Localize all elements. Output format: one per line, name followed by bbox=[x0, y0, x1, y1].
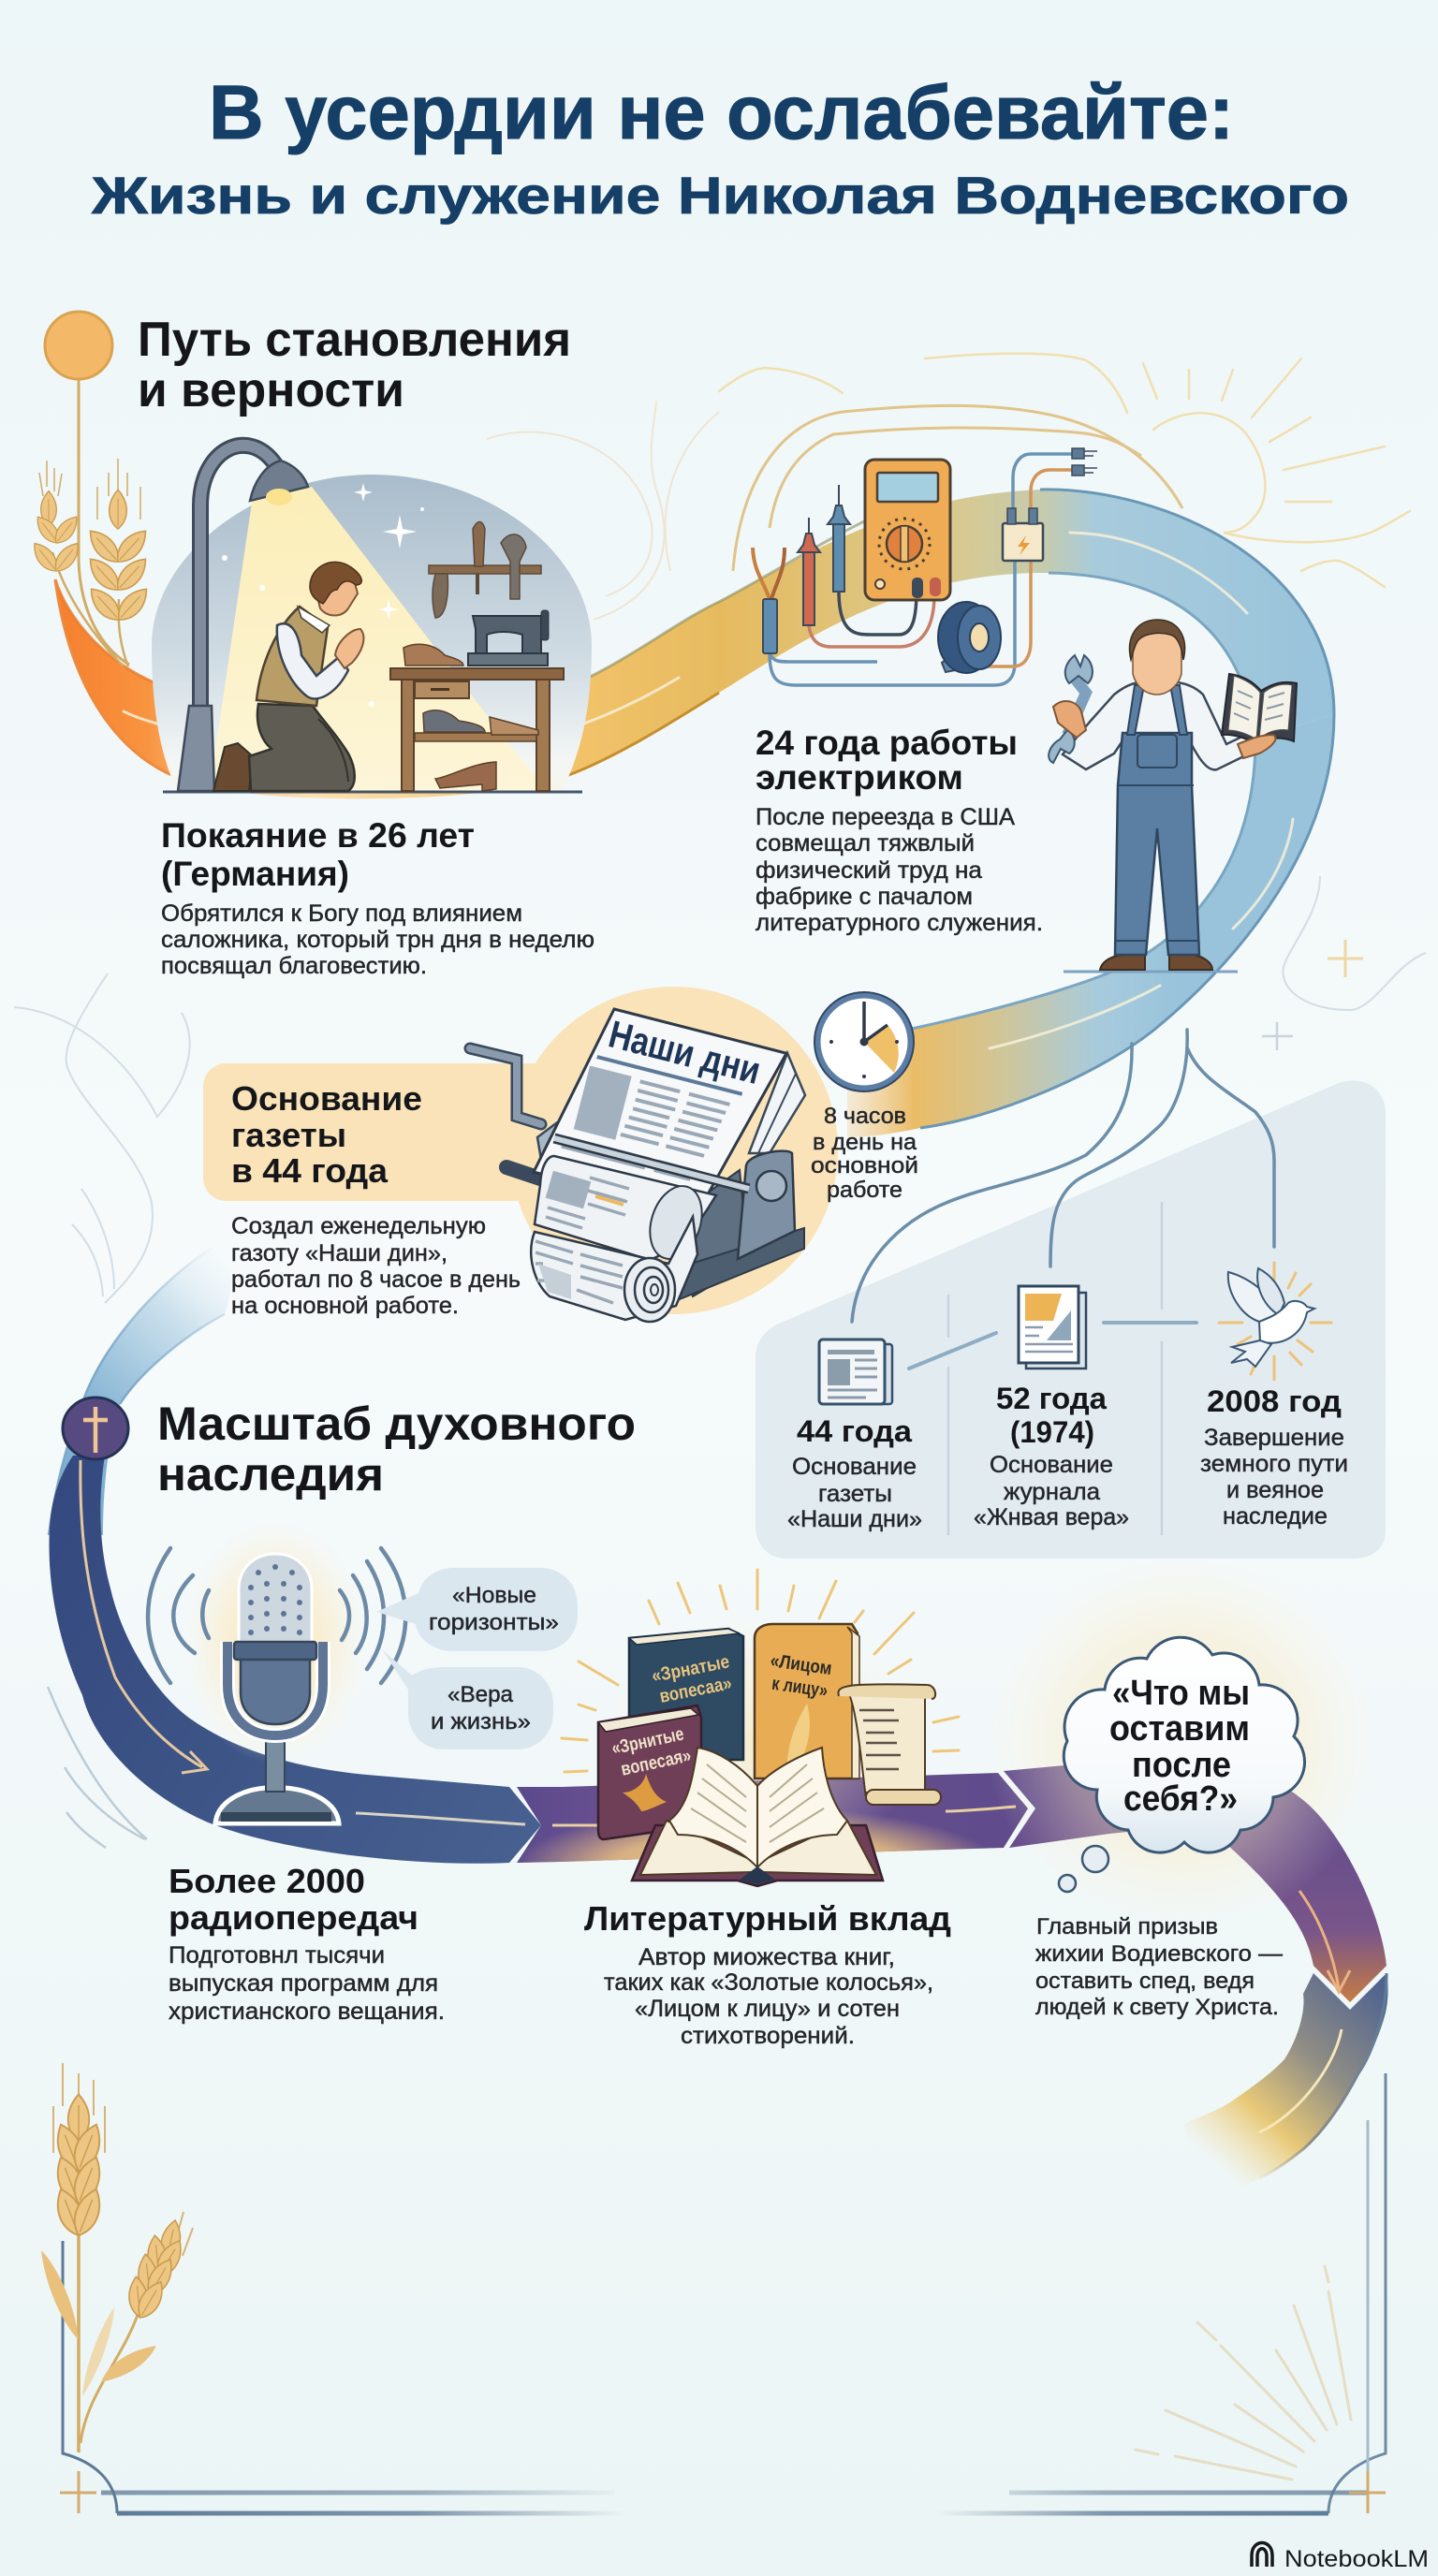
icon: dove with rays bbox=[1219, 1263, 1331, 1380]
text block: radio programs: Более 2000 bbox=[169, 1862, 365, 1900]
heading: Покаяние в 26 лет bbox=[161, 816, 475, 855]
maroon book: вопесая» bbox=[619, 1745, 693, 1780]
ribbon lower part bbox=[847, 714, 1334, 1137]
boot bbox=[213, 743, 253, 791]
speech bubble: Вера и жизнь: «Вера bbox=[448, 1682, 514, 1707]
question: «Что мы bbox=[1112, 1674, 1250, 1713]
heading: section one bbox=[138, 313, 571, 417]
paper stack bbox=[749, 1053, 805, 1153]
timeline entry: 2008 bbox=[1200, 1384, 1348, 1530]
description bbox=[756, 804, 1043, 936]
base bbox=[655, 1228, 804, 1303]
heading: в 44 года bbox=[231, 1151, 389, 1190]
heading: электриком bbox=[756, 758, 963, 797]
decorative wisps, left side bbox=[14, 973, 190, 1303]
thought cloud with question bbox=[986, 1554, 1379, 1928]
sound waves bbox=[148, 1548, 405, 1683]
gold glow under books bbox=[522, 1812, 980, 1863]
text: 8 hours note: 8 часов bbox=[824, 1104, 906, 1129]
question: оставим bbox=[1109, 1709, 1250, 1749]
side stem bbox=[81, 2315, 138, 2443]
text: newspaper description: Создал еженедельную bbox=[231, 1213, 486, 1239]
kneeling man praying bbox=[213, 562, 363, 791]
panel: timeline backdrop bbox=[756, 1081, 1386, 1559]
box bbox=[203, 1063, 562, 1201]
speech bubble: Новые горизонты: «Новые bbox=[452, 1583, 536, 1608]
glow bbox=[598, 1610, 917, 1872]
wheat ear left bbox=[28, 461, 124, 666]
gold book bbox=[755, 1624, 859, 1778]
section marker: cross node bbox=[63, 1398, 128, 1459]
timeline entry: 2008: Завершение bbox=[1204, 1425, 1344, 1451]
timeline entry: 44 years bbox=[787, 1414, 922, 1532]
crank handle bbox=[470, 1048, 541, 1124]
sewing machine bbox=[468, 610, 549, 666]
description: саложника, который трн дня в неделю bbox=[161, 927, 594, 953]
timeline entry: 2008: и веяное bbox=[1226, 1477, 1324, 1503]
vest bbox=[257, 607, 328, 706]
scene: electrician tools bbox=[753, 448, 1097, 685]
shoes bbox=[1100, 955, 1212, 970]
navy book bbox=[629, 1629, 743, 1760]
rays bbox=[562, 1570, 959, 1772]
text block: radio programs: Подготовнл тысячи bbox=[169, 1942, 385, 1969]
stem bbox=[266, 1735, 285, 1792]
text block: radio programs: христианского вещания. bbox=[169, 1998, 445, 2025]
cloud bbox=[1064, 1637, 1305, 1852]
timeline entry: 44 years: «Наши дни» bbox=[787, 1506, 922, 1532]
ground line bbox=[163, 790, 582, 794]
timeline entry: 2008: наследие bbox=[1223, 1503, 1328, 1530]
lower paper roll bbox=[531, 1217, 697, 1322]
text block: radio programs: выпуская программ для bbox=[169, 1970, 438, 1997]
text: 8 hours note: работе bbox=[827, 1178, 902, 1203]
heading: (Германия) bbox=[161, 855, 349, 893]
illustration: printing press bbox=[470, 1000, 805, 1322]
probes bbox=[798, 485, 850, 625]
base bbox=[215, 1788, 339, 1823]
maroon book bbox=[598, 1705, 701, 1839]
gold book: к лицу» bbox=[770, 1674, 829, 1702]
platform line bbox=[1064, 970, 1238, 973]
timeline entry: 52 years: «Жнвая вера» bbox=[974, 1504, 1129, 1530]
main stem bbox=[77, 2235, 81, 2452]
timeline separators bbox=[948, 1202, 1162, 1535]
bottom frame bbox=[60, 2073, 1386, 2513]
ribbon: final fading segment bbox=[1184, 1973, 1388, 2200]
question: после bbox=[1132, 1746, 1231, 1785]
timeline entry: 52 years: 52 года bbox=[996, 1382, 1107, 1415]
ribbon upper part bbox=[55, 490, 1334, 798]
text block: main call: оставить спед, ведя bbox=[1035, 1969, 1255, 1994]
head bbox=[315, 566, 358, 616]
collar bbox=[298, 607, 330, 633]
text block: repentance at 26 bbox=[161, 816, 594, 979]
timeline entry: 44 years: газеты bbox=[818, 1481, 892, 1507]
text: newspaper description: на основной работе. bbox=[231, 1293, 459, 1319]
text block: 24 years as electrician bbox=[756, 724, 1043, 936]
timeline entry: 2008: 2008 год bbox=[1207, 1384, 1342, 1418]
text: newspaper description bbox=[231, 1213, 521, 1319]
shoes bbox=[404, 644, 538, 791]
timeline entry: 52 years: (1974) bbox=[1010, 1415, 1094, 1449]
decorative rays, bottom right bbox=[1136, 2266, 1351, 2480]
heading bbox=[756, 724, 1018, 797]
description bbox=[161, 900, 594, 979]
open book bbox=[632, 1748, 883, 1886]
icon: clock bbox=[814, 992, 914, 1091]
decorative wisps near the first scene bbox=[487, 401, 719, 620]
left frame bbox=[537, 1112, 599, 1236]
text block: radio programs bbox=[169, 1862, 445, 2025]
text block: main call: жихии Водиевского — bbox=[1035, 1941, 1283, 1967]
description: Обрятился к Богу под влиянием bbox=[161, 900, 522, 927]
right frame bbox=[738, 1151, 795, 1259]
open book on palm bbox=[1222, 674, 1297, 758]
workbench bbox=[390, 668, 564, 791]
navy book: «Зрнатые bbox=[650, 1651, 731, 1687]
text block: literary contribution: таких как «Золотые колосья», bbox=[604, 1969, 933, 1996]
text block: main call: Главный призыв bbox=[1036, 1914, 1218, 1939]
logo: NotebookLM: NotebookLM bbox=[1284, 2546, 1429, 2572]
heading bbox=[231, 1079, 422, 1190]
scene: repentance under street lamp bbox=[152, 446, 592, 792]
newspaper sheet: Наши дни bbox=[605, 1012, 765, 1092]
title bbox=[91, 70, 1349, 225]
decorative sun and gold lines, top right bbox=[719, 354, 1410, 587]
timeline entry: 52 years: журнала bbox=[1004, 1479, 1100, 1505]
thought bubbles bbox=[1082, 1846, 1108, 1872]
roller of paper bbox=[535, 1156, 716, 1266]
axle bbox=[506, 1167, 543, 1179]
illustration: radio microphone bbox=[148, 1520, 405, 1823]
speech bubble: Новые горизонты bbox=[376, 1568, 578, 1651]
yoke bbox=[227, 1642, 323, 1735]
question: себя?» bbox=[1123, 1779, 1238, 1819]
text block: literary contribution bbox=[584, 1899, 951, 2049]
timeline entry: 52 years: Основание bbox=[990, 1452, 1113, 1478]
speech bubble: Вера и жизнь: и жизнь» bbox=[431, 1709, 531, 1734]
timeline entry: 2008: земного пути bbox=[1200, 1451, 1348, 1477]
description: фабрике с пачалом bbox=[756, 884, 973, 910]
maroon book: «Зрнитые bbox=[610, 1724, 685, 1759]
description: литературного служения. bbox=[756, 910, 1043, 936]
callout: newspaper founding box bbox=[203, 1063, 562, 1201]
decorative wisps and plus marks, right side bbox=[1262, 876, 1426, 1050]
overalls bbox=[1115, 733, 1199, 955]
newspaper sheet bbox=[534, 1000, 786, 1225]
inner press body bbox=[674, 1170, 749, 1296]
dome backdrop bbox=[152, 475, 592, 792]
text: 8 hours note: основной bbox=[811, 1153, 918, 1178]
ribbon: navy segment bbox=[49, 1456, 541, 1864]
timeline entry: 44 years: 44 года bbox=[797, 1414, 912, 1448]
head and hair bbox=[1133, 628, 1181, 695]
grille bbox=[239, 1554, 312, 1642]
gold arcs around electric tools bbox=[733, 405, 1182, 571]
sparkles bbox=[222, 483, 424, 707]
heading: 24 года работы bbox=[756, 724, 1018, 762]
wheat ear right bbox=[83, 459, 154, 666]
ribbon: first journey arc bbox=[55, 490, 1334, 1137]
ribbon highlights bbox=[124, 533, 1293, 1048]
illustration: books with rays bbox=[562, 1570, 959, 1886]
timeline entry: 44 years: Основание bbox=[792, 1454, 917, 1480]
heading: section one: и верности bbox=[138, 363, 404, 417]
scroll bbox=[838, 1684, 941, 1805]
heading: section two: наследия bbox=[157, 1448, 384, 1500]
main ear bbox=[51, 2063, 107, 2239]
ribbon: purple middle segment bbox=[517, 1773, 1028, 1863]
ribbon: purple descending segment bbox=[1004, 1763, 1387, 2002]
glow bbox=[182, 1520, 369, 1764]
sleeve bbox=[277, 623, 348, 698]
text block: literary contribution: Автор миожества книг, bbox=[638, 1944, 895, 1970]
insulating tape bbox=[938, 602, 1001, 673]
highlight arrow bbox=[81, 1460, 207, 1773]
hands bbox=[335, 629, 363, 668]
sun circle bbox=[45, 312, 112, 379]
heading: section two bbox=[157, 1398, 636, 1500]
text block: main call bbox=[1035, 1914, 1283, 2020]
text block: main call: людей к свету Христа. bbox=[1035, 1995, 1279, 2020]
speech bubble: Новые горизонты: горизонты» bbox=[429, 1610, 559, 1635]
shirt and arms bbox=[1063, 681, 1259, 769]
multimeter bbox=[865, 460, 950, 600]
heading: section two: Масштаб духовного bbox=[157, 1398, 636, 1450]
title: Жизнь и служение Николая Водневского bbox=[91, 166, 1349, 225]
glow bbox=[986, 1554, 1379, 1928]
rod bbox=[554, 1138, 749, 1189]
timeline entry: 52 years bbox=[974, 1382, 1129, 1530]
street lamp bbox=[178, 446, 308, 791]
tools on a rack bbox=[429, 522, 541, 618]
stripped cable bbox=[753, 548, 785, 653]
trousers bbox=[249, 704, 355, 791]
leaves bbox=[41, 2250, 79, 2340]
collar bbox=[234, 1642, 316, 1660]
decorative arcs under ribbon bbox=[48, 1687, 147, 1848]
stem bbox=[79, 379, 129, 665]
highlight bbox=[552, 1807, 1016, 1825]
text block: literary contribution: «Лицом к лицу» и сотен bbox=[635, 1996, 900, 2022]
heading bbox=[161, 816, 475, 893]
ribbon outlines bbox=[55, 490, 1334, 1128]
speech bubble: Вера и жизнь bbox=[382, 1649, 553, 1749]
question bbox=[1109, 1674, 1250, 1819]
worker with wrench and open book bbox=[1049, 620, 1297, 972]
fuse box with lightning bbox=[1003, 508, 1043, 561]
text: 8 hours note: в день на bbox=[813, 1130, 917, 1155]
heading: газеты bbox=[231, 1116, 346, 1154]
text: 8 hours note bbox=[811, 1104, 918, 1203]
hair bbox=[310, 562, 361, 604]
text: newspaper description: газоту «Наши дин», bbox=[231, 1240, 448, 1266]
wrench in hand bbox=[1049, 655, 1093, 763]
heading: Основание bbox=[231, 1079, 422, 1118]
highlight bbox=[356, 1813, 525, 1824]
timeline connectors bbox=[909, 1323, 1196, 1368]
gold book: «Лицом bbox=[769, 1650, 833, 1679]
press backdrop circle bbox=[510, 987, 838, 1314]
plugs bbox=[1072, 448, 1097, 476]
icon: newspaper bbox=[819, 1339, 892, 1404]
icon: magazine bbox=[1019, 1286, 1086, 1368]
description: физический труд на bbox=[756, 857, 982, 884]
section marker: sun with stem and wheat bbox=[28, 312, 154, 666]
navy book: вопесаа» bbox=[658, 1673, 733, 1707]
description: совмещал тяжвлый bbox=[756, 830, 975, 856]
description: После переезда в США bbox=[756, 804, 1015, 830]
heading: section one: Путь становления bbox=[138, 313, 571, 367]
branching lines from ribbon to timeline bbox=[852, 1030, 1274, 1322]
logo: NotebookLM bbox=[1252, 2542, 1429, 2572]
text block: radio programs: радиопередач bbox=[169, 1898, 418, 1937]
ribbon: link down to second section bbox=[49, 1238, 232, 1535]
description: посвящал благовестию. bbox=[161, 953, 427, 979]
title: В усердии не ослабевайте: bbox=[209, 70, 1234, 155]
decorative wheat, bottom left bbox=[41, 2063, 193, 2452]
side ear bbox=[127, 2212, 193, 2322]
wires bbox=[770, 454, 1072, 685]
light beam bbox=[187, 487, 548, 792]
body bbox=[241, 1657, 310, 1724]
ribbon highlights and edge bbox=[1259, 1891, 1387, 2179]
text: newspaper description: работал по 8 часое в день bbox=[231, 1266, 521, 1293]
text block: literary contribution: Литературный вклад bbox=[584, 1899, 951, 1938]
text block: literary contribution: стиxотворений. bbox=[681, 2023, 855, 2049]
